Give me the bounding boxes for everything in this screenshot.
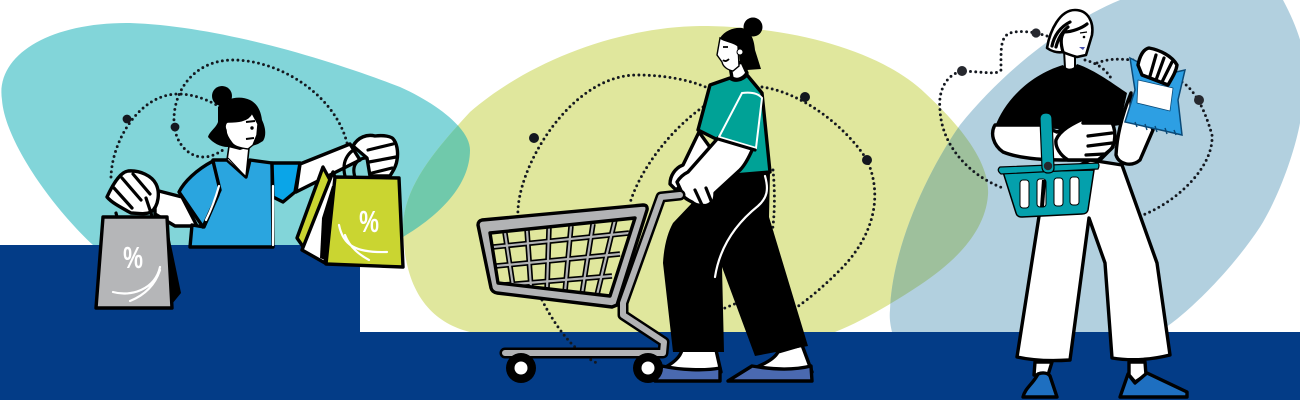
cart frame [505, 195, 680, 353]
figure: woman with basket and snack bag [940, 10, 1212, 397]
neck [1064, 50, 1075, 70]
shoes [1023, 373, 1057, 397]
percent sign: % [123, 240, 143, 275]
bag handle [344, 148, 369, 177]
dotted orbit lines [940, 28, 1212, 215]
shirt [698, 75, 770, 175]
left sleeve [179, 161, 220, 227]
figure: woman with shopping bags [96, 60, 403, 308]
blob: green background [403, 26, 988, 332]
left arm [155, 190, 197, 226]
snack bag [1125, 58, 1185, 135]
neck [730, 62, 747, 79]
blob overlap: green and blue [890, 128, 988, 304]
fist [1138, 48, 1177, 85]
back shopping bags [297, 167, 338, 263]
trousers [663, 172, 808, 356]
shopping cart [478, 195, 680, 383]
basket grid [493, 220, 629, 295]
figure: woman pushing shopping cart [478, 18, 875, 383]
right arm [296, 144, 360, 192]
grey shopping bag [96, 216, 181, 308]
right arm [1116, 93, 1153, 164]
face [225, 113, 258, 149]
dotted orbit lines [518, 75, 875, 363]
sleeve [719, 93, 762, 148]
right fist [353, 135, 398, 176]
wheels [506, 353, 536, 383]
left fist [107, 171, 158, 217]
hand [1056, 118, 1115, 160]
hair and bun [720, 18, 762, 70]
navy floor [0, 245, 1300, 400]
hair and bun [208, 86, 265, 150]
torso shirt [190, 160, 273, 247]
blob overlap: teal and green [403, 125, 470, 237]
neck [227, 146, 249, 177]
percent sign: % [359, 204, 379, 239]
basket rim [478, 205, 647, 307]
left arm [993, 123, 1113, 160]
right sleeve [272, 163, 300, 202]
face [717, 38, 739, 71]
blob: teal background [1, 23, 470, 258]
shoes [655, 345, 812, 381]
blob: blue background [890, 0, 1300, 336]
green shopping bag [326, 177, 403, 267]
near arm and hand [677, 138, 753, 206]
head and hair [1047, 10, 1092, 57]
far arm and hand [670, 132, 712, 190]
teal basket [998, 113, 1099, 217]
dotted orbit lines [111, 60, 347, 177]
ankles [1034, 362, 1052, 375]
black top [995, 64, 1127, 130]
bag label [1137, 80, 1173, 111]
trousers [1017, 160, 1170, 361]
